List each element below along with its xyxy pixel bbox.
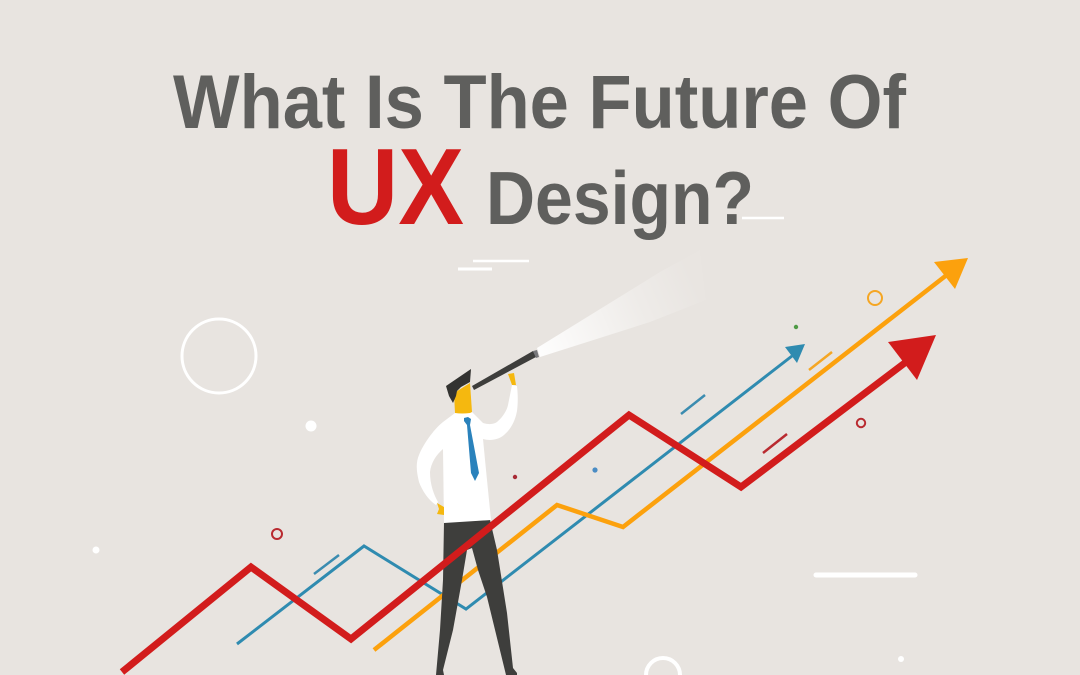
raised hand	[508, 373, 516, 385]
hair	[446, 369, 471, 403]
shirt	[417, 385, 518, 523]
title highlight: UX: UX	[327, 126, 464, 248]
necktie	[464, 417, 479, 481]
telescope	[472, 350, 539, 390]
title line one: What Is The Future Of	[173, 60, 907, 145]
light beam	[537, 250, 706, 357]
title line two: Design?	[486, 156, 754, 240]
title	[173, 60, 907, 248]
head and neck	[454, 383, 472, 414]
businessman with telescope	[417, 250, 706, 675]
orange trend arrow	[374, 258, 968, 650]
decorative white shapes	[92, 218, 915, 675]
red trend arrow	[122, 335, 936, 672]
hip hand	[437, 503, 444, 515]
blue trend arrow	[237, 344, 805, 644]
decorative coloured accents	[272, 291, 882, 574]
trousers	[436, 520, 517, 675]
